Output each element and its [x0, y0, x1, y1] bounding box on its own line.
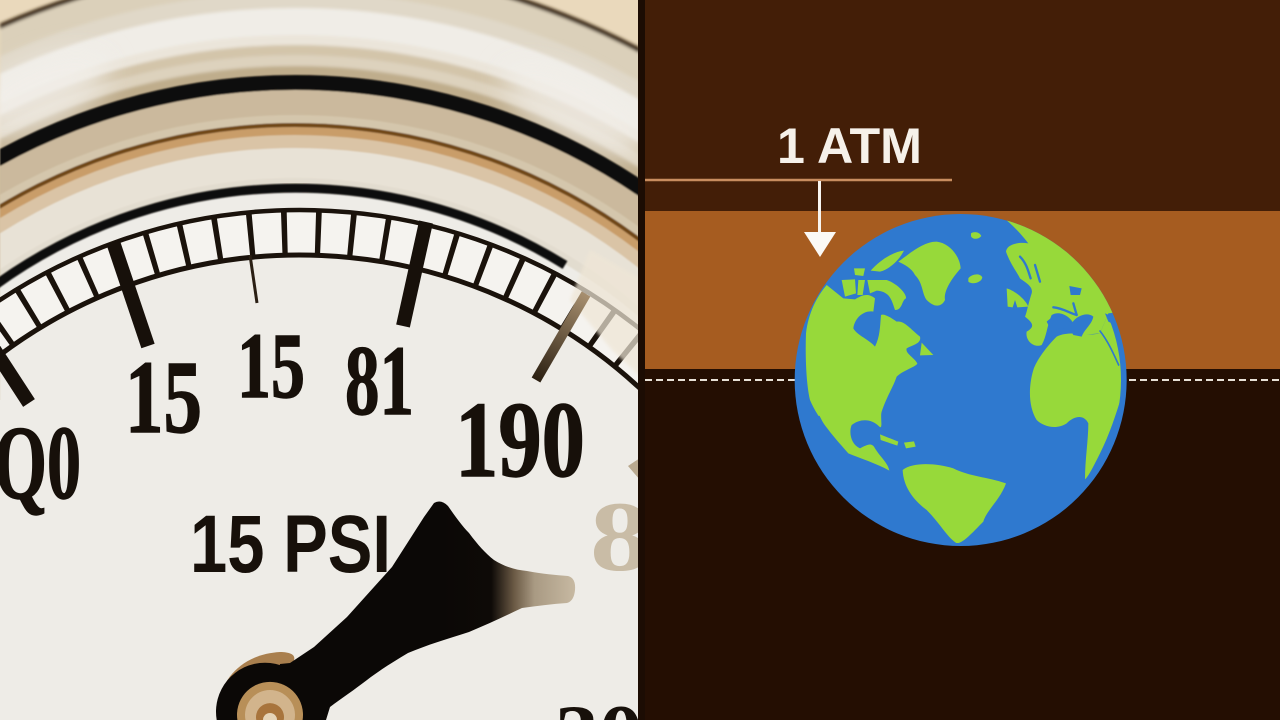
dial face — [0, 192, 638, 400]
Europe and northern Asia — [1006, 220, 1112, 346]
gauge metal rim — [0, 0, 638, 275]
panel: pressure gauge photo — [0, 0, 665, 720]
South America — [903, 464, 1006, 543]
top-of-atmosphere line — [645, 179, 952, 181]
dial numbers: 15 — [237, 315, 305, 418]
faded dial number: 8 — [590, 481, 650, 592]
label: 1 ATM: 1 ATM — [777, 118, 922, 174]
ground — [645, 369, 1280, 720]
dial numbers: 15 — [125, 340, 202, 455]
black rim band and gold ring — [0, 74, 638, 400]
small islands — [880, 232, 982, 448]
surface dashed line — [645, 379, 1280, 381]
graduated scale — [0, 210, 665, 395]
panel: atmosphere diagram — [638, 0, 1280, 720]
arrow: downward pressure — [804, 181, 836, 257]
dial numbers: 190 — [455, 381, 585, 500]
label: 15 PSI: 15 PSI — [190, 499, 391, 590]
dial numbers: 81 — [345, 325, 414, 436]
Africa and Arabia — [1030, 313, 1127, 479]
UK — [1007, 288, 1028, 307]
rim highlights — [0, 68, 638, 170]
North America — [806, 285, 920, 471]
inland seas — [819, 257, 1119, 437]
icon: earth globe — [795, 214, 1133, 546]
faded marker — [628, 460, 638, 478]
Greenland — [898, 242, 961, 306]
arctic islands — [842, 251, 906, 310]
right-side fade on scale — [570, 268, 638, 374]
atmosphere band — [645, 211, 1280, 369]
major tick marks — [0, 222, 586, 403]
gauge needle and hub — [216, 502, 575, 720]
dial numbers — [0, 334, 582, 516]
dial bezel line — [0, 188, 565, 289]
